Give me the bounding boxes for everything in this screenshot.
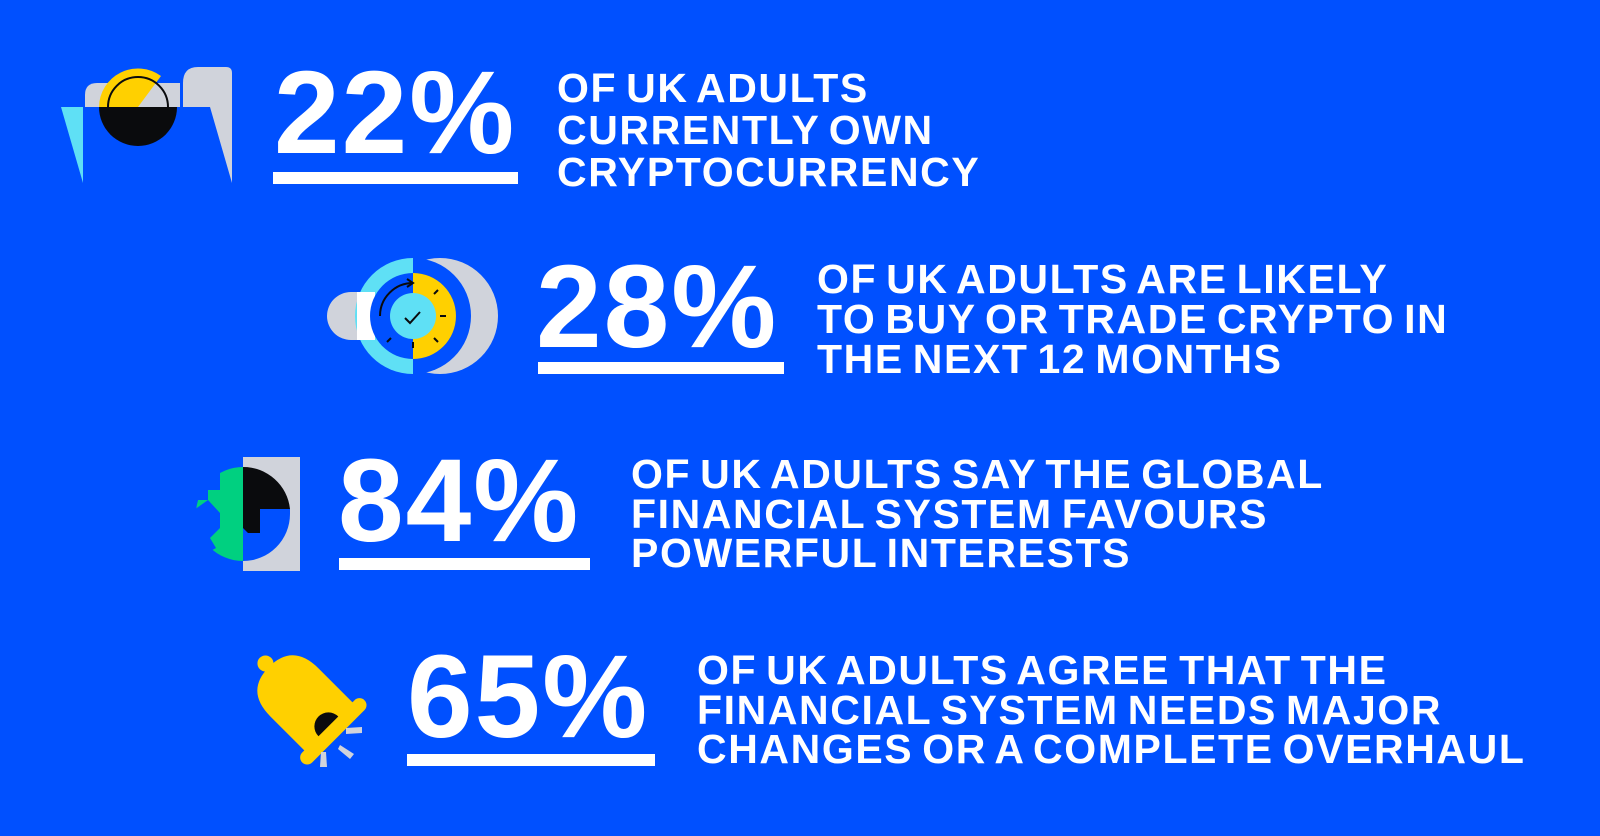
text 2: TO BUY OR TRADE CRYPTO IN [817, 296, 1448, 342]
icon: folder with gauge [61, 67, 232, 183]
number 28%: 28% [536, 241, 778, 373]
text 3 [631, 451, 1324, 576]
icon: bell [257, 655, 366, 767]
text 2: OF UK ADULTS ARE LIKELY [817, 256, 1388, 302]
text 4: OF UK ADULTS AGREE THAT THE [697, 647, 1388, 693]
text 1: CRYPTOCURRENCY [557, 149, 980, 195]
number 22%: 22% [274, 47, 516, 179]
text 3: FINANCIAL SYSTEM FAVOURS [631, 490, 1268, 536]
number 84%: 84% [338, 435, 580, 567]
text 3: POWERFUL INTERESTS [631, 530, 1131, 576]
text 4: CHANGES OR A COMPLETE OVERHAUL [697, 726, 1526, 772]
text 1: CURRENTLY OWN [557, 107, 934, 153]
text 4 [697, 647, 1526, 772]
text 1: OF UK ADULTS [557, 65, 869, 111]
icon: clock ring [327, 258, 498, 374]
text 2 [817, 256, 1448, 382]
text 3: OF UK ADULTS SAY THE GLOBAL [631, 451, 1324, 497]
icon: gear and quarter circle [196, 457, 300, 571]
text 1 [557, 65, 980, 195]
text 2: THE NEXT 12 MONTHS [817, 336, 1283, 382]
text 4: FINANCIAL SYSTEM NEEDS MAJOR [697, 686, 1442, 732]
number 65%: 65% [407, 631, 649, 763]
